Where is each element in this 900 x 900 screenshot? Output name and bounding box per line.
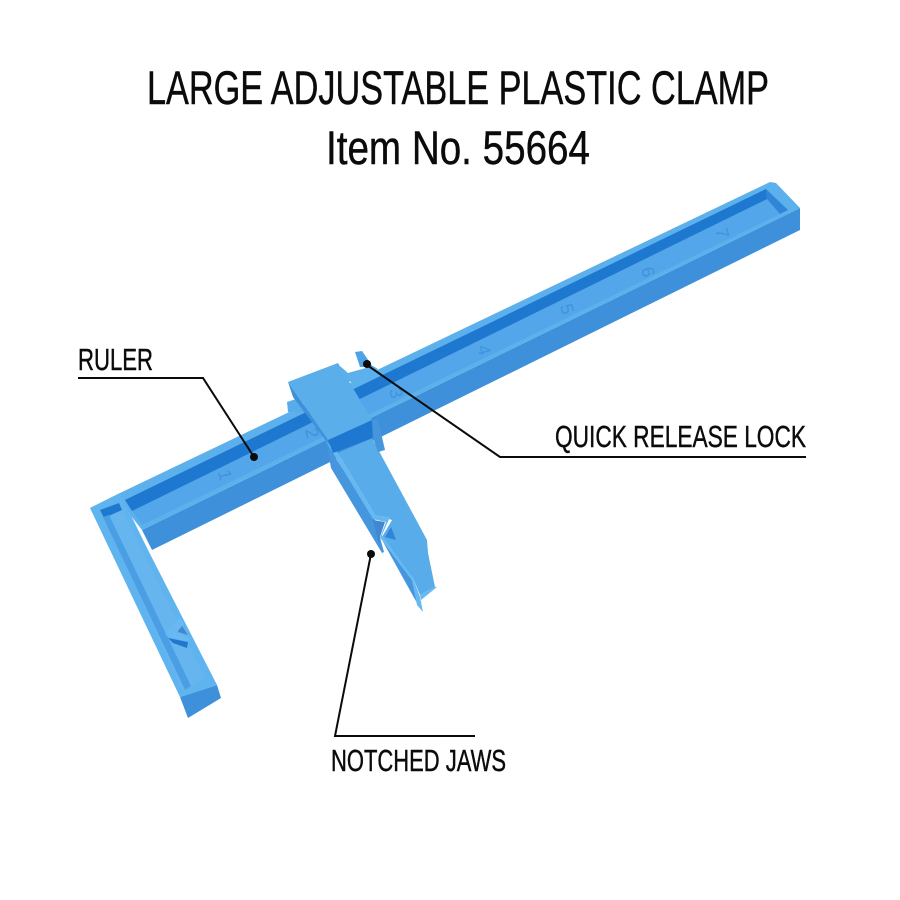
- ruler numbers: 2: [301, 426, 323, 440]
- ruler numbers: 7: [711, 226, 733, 240]
- callout: notched jaws: [331, 550, 506, 778]
- title: [147, 61, 769, 174]
- ruler numbers: 6: [637, 265, 659, 279]
- callout: ruler: RULER: [78, 342, 153, 377]
- quick release lock: [287, 351, 378, 412]
- ruler numbers: 4: [473, 343, 495, 357]
- notch: [373, 520, 385, 545]
- ruler numbers: 5: [556, 302, 578, 316]
- title: Item No. 55664: [326, 121, 590, 174]
- ruler numbers: [214, 226, 733, 482]
- callout: quick release lock: [363, 360, 806, 457]
- sliding jaw: [288, 363, 437, 612]
- ruler bar: [90, 182, 800, 550]
- ruler numbers: 1: [214, 468, 236, 482]
- clamp illustration: [90, 182, 800, 718]
- callout: notched jaws: NOTCHED JAWS: [331, 743, 506, 778]
- jaw face: [338, 438, 435, 595]
- fixed jaw: [90, 493, 221, 718]
- callout: ruler: [78, 342, 258, 461]
- callout: quick release lock: QUICK RELEASE LOCK: [555, 419, 806, 454]
- jaw side face: [327, 445, 384, 553]
- ruler numbers: 3: [385, 386, 407, 400]
- jaw rim: [325, 440, 423, 612]
